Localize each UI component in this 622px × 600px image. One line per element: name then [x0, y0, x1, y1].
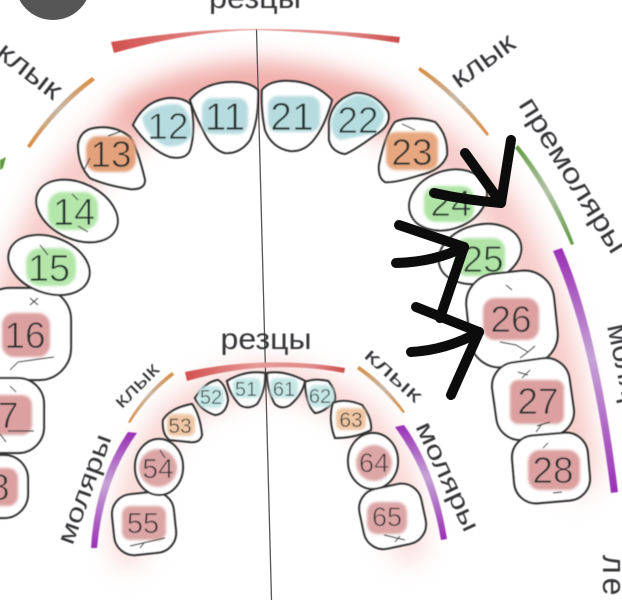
midline — [256, 29, 272, 600]
hand-drawn arrow 3 — [411, 307, 479, 395]
tooth 52 — [195, 380, 228, 415]
tooth 18 — [0, 455, 28, 518]
lower arch — [52, 323, 485, 557]
tooth 21: 21 — [270, 96, 314, 139]
tooth 51: 51 — [235, 379, 257, 401]
hand-drawn arrow 2 — [396, 225, 464, 318]
range arc: lower right canine — [357, 366, 405, 413]
tooth 22: 22 — [337, 100, 379, 141]
tooth 23 — [379, 118, 447, 182]
upper gum glow — [0, 88, 575, 470]
tooth 52: 52 — [200, 387, 222, 409]
tooth 26 — [463, 268, 561, 370]
range arc: upper left premolars — [0, 157, 6, 170]
tooth 17 — [0, 378, 44, 453]
label: lower right canine: клык — [360, 344, 427, 407]
tooth 62 — [305, 380, 335, 413]
tooth 27 — [489, 355, 577, 443]
tooth 61 — [267, 372, 305, 407]
tooth 51 — [227, 372, 265, 407]
label: lower right molars: моляры — [410, 417, 485, 536]
tooth 55: 55 — [127, 508, 159, 540]
range arc: lower right molars — [395, 425, 447, 540]
range arc: upper right molars — [553, 248, 618, 493]
tooth 55 — [110, 490, 178, 557]
range bar: lower incisors — [185, 362, 345, 381]
tooth 12 — [133, 98, 193, 158]
label: upper right premolars: премоляры — [513, 91, 622, 259]
range bar: upper incisors — [111, 29, 400, 53]
label: upper right canine: клык — [444, 26, 521, 94]
tooth 65 — [355, 480, 430, 553]
tooth 61: 61 — [273, 379, 295, 401]
tooth 24 — [400, 159, 496, 241]
tooth 64: 64 — [359, 448, 389, 478]
tooth 64 — [348, 433, 398, 489]
tooth 14 — [26, 167, 128, 255]
tooth 15: 15 — [28, 248, 70, 290]
tooth 26: 26 — [490, 299, 532, 340]
tooth 16 — [0, 288, 71, 380]
tooth 25: 25 — [462, 239, 504, 280]
hand-drawn arrow 1 — [434, 140, 511, 203]
tooth 62: 62 — [309, 386, 331, 408]
tooth 14: 14 — [53, 192, 95, 234]
tooth 54: 54 — [142, 453, 174, 484]
lower gum glow — [128, 378, 408, 552]
tooth 13: 13 — [90, 134, 132, 175]
tooth 28 — [510, 431, 592, 505]
range arc: lower left molars — [91, 432, 137, 548]
tooth 54 — [135, 439, 183, 495]
tooth 63: 63 — [339, 409, 363, 432]
range arc: upper left canine — [27, 77, 95, 148]
label: lower left canine: клык — [110, 359, 164, 413]
range arc: upper right premolars — [515, 145, 574, 245]
tooth 22 — [329, 93, 389, 154]
label: lower left molars: моляры — [52, 430, 117, 548]
tooth 11 — [190, 82, 258, 153]
upper gum glow, front — [130, 80, 390, 115]
tooth 53 — [163, 404, 202, 442]
tooth 16: 16 — [4, 315, 46, 356]
tooth 25 — [432, 215, 528, 293]
tooth 12: 12 — [147, 106, 189, 147]
heading: lower incisors: резцы — [220, 323, 312, 356]
dark circle at top left — [15, 0, 91, 20]
tooth 13 — [78, 127, 145, 189]
tooth 65: 65 — [372, 502, 402, 532]
tooth 21 — [262, 81, 332, 151]
tooth 63 — [331, 401, 371, 438]
tooth 53: 53 — [168, 415, 192, 438]
range arc: lower left canine — [128, 372, 174, 423]
tooth 24: 24 — [430, 183, 472, 224]
tooth 28: 28 — [532, 450, 574, 491]
tooth 15 — [0, 224, 98, 306]
range arc: upper right canine — [418, 67, 489, 136]
tooth 23: 23 — [391, 132, 433, 173]
tooth 27: 27 — [517, 381, 559, 422]
tooth 11: 11 — [205, 96, 245, 139]
